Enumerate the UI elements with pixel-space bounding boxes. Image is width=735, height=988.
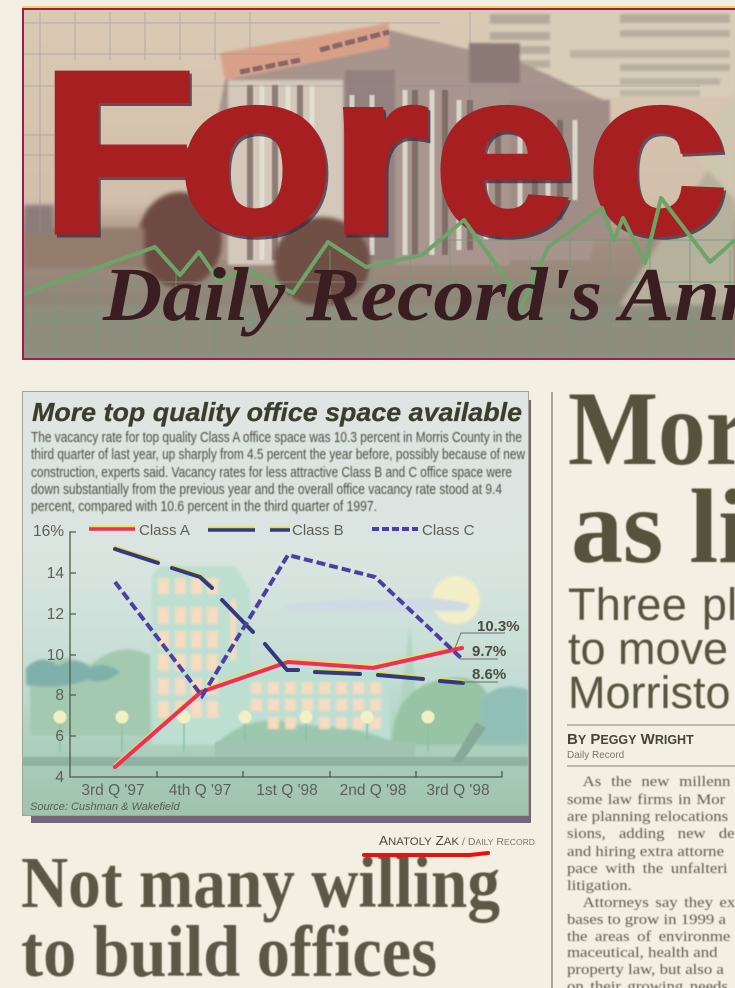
article body text: property law, but also a — [567, 962, 724, 978]
article body text: sions, adding new de — [567, 826, 735, 842]
y-axis labels — [33, 523, 64, 786]
article body text: are planning relocations — [567, 809, 728, 825]
headline: Not many willing to build offices: Not many willing — [21, 842, 500, 923]
y-axis labels: 16% — [33, 523, 64, 540]
byline — [567, 725, 735, 766]
article body text: the areas of environme — [567, 929, 730, 945]
y-axis labels: 12 — [47, 606, 64, 623]
line: Class C — [115, 555, 462, 696]
chart description text: construction, experts said. Vacancy rates for less attractive Class B and C office space were — [31, 465, 512, 481]
source note: Source: Cushman & Wakefield — [30, 801, 180, 813]
banner line graph — [24, 198, 735, 318]
panel: office vacancy chart — [22, 391, 531, 823]
chart description text: The vacancy rate for top quality Class A office space was 10.3 percent in Morris County in the — [31, 430, 522, 446]
byline: Daily Record — [567, 750, 624, 761]
headline: Not many willing to build offices — [21, 842, 500, 988]
x-axis labels: 4th Q '97 — [169, 782, 231, 799]
credit line: ANATOLY ZAK — [379, 833, 460, 848]
banner grid lines — [24, 12, 700, 230]
article subheadline: to move — [568, 623, 728, 674]
line: Class A — [115, 646, 462, 767]
legend: Class A — [139, 522, 190, 539]
article headline — [568, 369, 735, 585]
data labels: 9.7% — [472, 643, 506, 660]
axes — [70, 532, 502, 777]
byline: BY PEGGY WRIGHT — [567, 731, 694, 748]
line: Class B — [115, 547, 463, 683]
article body text: some law firms in Mor — [567, 792, 726, 808]
article body text: As the new millenn — [583, 774, 730, 790]
credit line: / DAILY RECORD — [462, 836, 535, 848]
legend: Class B — [292, 522, 344, 539]
y-axis labels: 8 — [55, 687, 64, 704]
article body text: pace with the unfalteri — [567, 861, 728, 877]
article subheadline: Three pl — [568, 579, 735, 630]
data labels — [455, 618, 520, 683]
article body text: litigation. — [567, 878, 632, 894]
data labels: 8.6% — [472, 666, 506, 683]
article body text: Attorneys say they ex — [583, 895, 735, 911]
building facade columns and windows — [240, 32, 575, 260]
chart description text: third quarter of last year, up sharply from 4.5 percent the year before, possibly because of new — [31, 447, 525, 463]
x-axis labels: 3rd Q '97 — [81, 782, 145, 799]
banner: Forecast header — [22, 6, 735, 360]
legend — [89, 522, 475, 539]
chart description text: percent, compared with 10.6 percent in the third quarter of 1997. — [31, 499, 377, 515]
column divider — [551, 392, 553, 988]
x-axis labels: 1st Q '98 — [256, 782, 318, 799]
red marker underline — [364, 853, 488, 855]
data labels: 10.3% — [477, 618, 520, 635]
article body text: maceutical, health and — [567, 945, 718, 961]
article body text: and hiring extra attorne — [567, 844, 724, 860]
x-axis labels — [81, 782, 490, 799]
article subheadline — [568, 579, 735, 718]
legend: Class C — [422, 522, 475, 539]
headline word: Forec — [44, 28, 729, 283]
credit line — [379, 833, 535, 848]
article body text — [567, 774, 735, 988]
chart description text — [31, 430, 525, 515]
headline word — [54, 70, 726, 240]
y-axis labels: 10 — [47, 647, 64, 664]
x-axis labels: 2nd Q '98 — [340, 782, 406, 799]
chart background illustration — [23, 566, 528, 766]
y-axis labels: 6 — [55, 728, 64, 745]
article body text: bases to grow in 1999 a — [567, 912, 726, 928]
x-axis labels: 3rd Q '98 — [426, 782, 490, 799]
y-axis labels: 4 — [55, 769, 64, 786]
chart title: More top quality office space available — [32, 397, 522, 427]
headline word: Forec — [42, 25, 727, 280]
article subheadline: Morristo — [568, 667, 731, 718]
y-axis labels: 14 — [47, 565, 64, 582]
chart description text: down substantially from the previous year and the overall office vacancy rate stood at 9.4 — [31, 482, 502, 498]
